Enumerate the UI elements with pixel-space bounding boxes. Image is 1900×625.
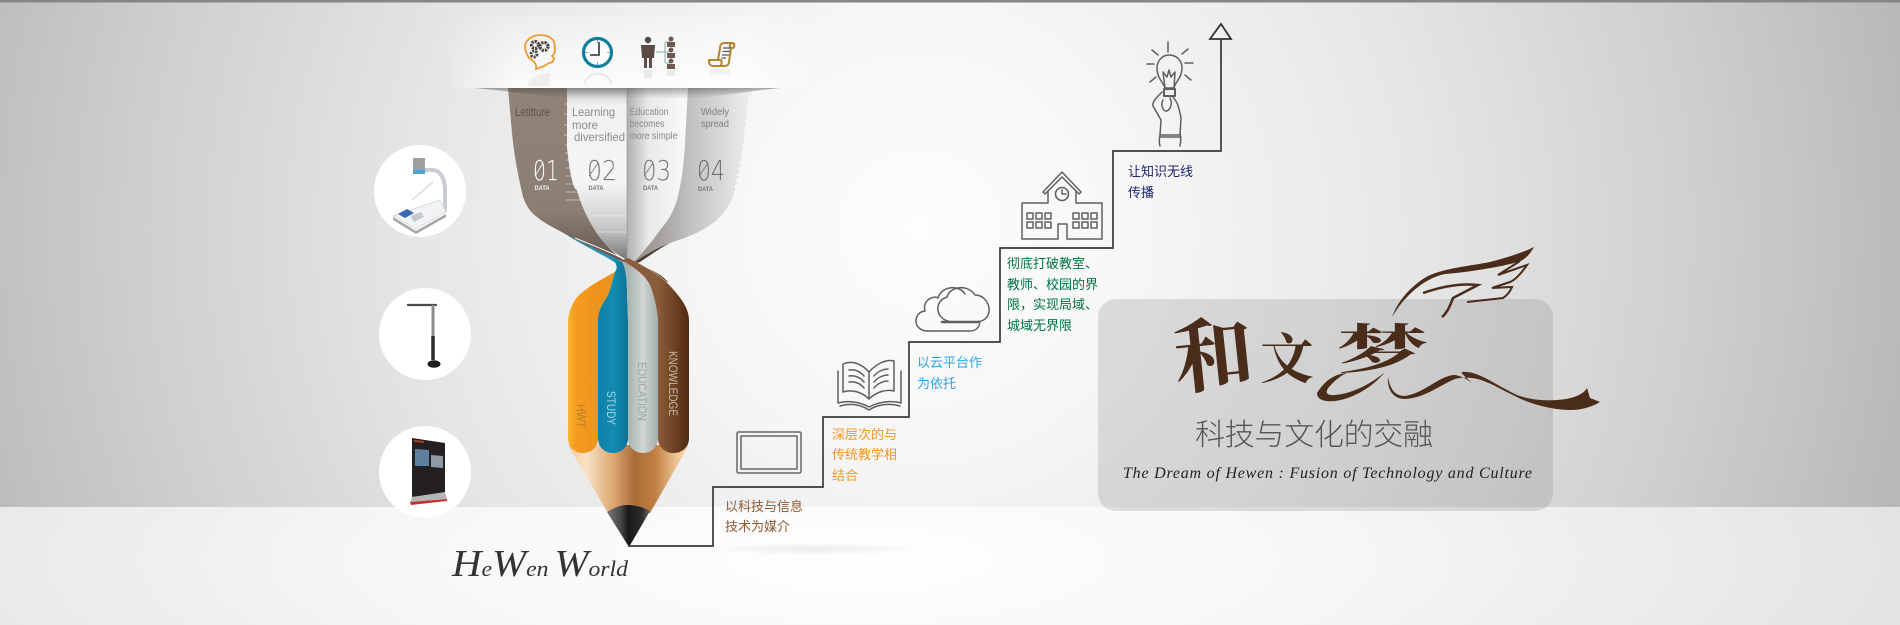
step caption 3: 以云平台作 xyxy=(917,355,982,370)
icon: cloud xyxy=(916,288,989,331)
logo swoosh xyxy=(1317,372,1385,401)
logo tail xyxy=(1388,372,1600,410)
ribbon text: 02: more xyxy=(572,118,598,132)
product circle: scanner lamp xyxy=(379,288,471,380)
step caption 1: 以科技与信息 xyxy=(725,499,803,514)
logo text: 和 xyxy=(1167,288,1259,411)
ribbon text: 03: Education xyxy=(630,106,669,118)
logo text: 梦 xyxy=(1336,307,1429,383)
step shadow xyxy=(705,543,925,555)
stripe: blue xyxy=(598,258,628,453)
ribbon text: 02 xyxy=(572,105,625,192)
ribbon text: 02: DATA xyxy=(588,185,604,192)
stripe: grey: EDUCATION xyxy=(635,362,649,421)
signature: HeWen World xyxy=(451,543,629,585)
step caption 4: 限，实现局域、 xyxy=(1007,297,1098,312)
ribbon text: 04: 04 xyxy=(697,154,725,187)
stripe: blue: STUDY xyxy=(604,391,618,425)
step caption 4: 城域无界限 xyxy=(1007,318,1072,333)
ribbon text: 02: diversified xyxy=(574,130,625,144)
logo text: 文 xyxy=(1260,317,1314,394)
ribbon text: 01: 01 xyxy=(533,154,559,187)
product circle: display kiosk xyxy=(379,426,471,518)
icon: light bulb in hand xyxy=(1147,42,1193,146)
ribbon text: 03 xyxy=(630,106,678,192)
twist bands xyxy=(567,235,682,300)
ribbon text: 02: 02 xyxy=(587,154,617,187)
ribbon text: 03: DATA xyxy=(643,185,658,192)
icon: organisation chart xyxy=(641,36,675,78)
logo wing xyxy=(1392,247,1534,317)
ribbon text: 01 xyxy=(515,105,559,192)
ribbon text: 03: 03 xyxy=(642,154,671,187)
icon: scroll xyxy=(709,43,734,75)
step caption 4: 教师、校园的界 xyxy=(1007,277,1098,292)
step caption 4: 彻底打破教室、 xyxy=(1007,256,1098,271)
brand logo xyxy=(1167,247,1600,411)
icon panel with shadow xyxy=(476,38,780,98)
icon: clock xyxy=(584,38,612,84)
ribbon text: 04: DATA xyxy=(698,186,713,193)
icon: tablet xyxy=(737,432,801,473)
ribbon text: 01: Letitture xyxy=(515,105,550,119)
step caption 2: 深层次的与 xyxy=(832,427,897,442)
step caption 5: 传播 xyxy=(1128,185,1154,200)
pencil wood xyxy=(568,445,689,513)
brand english slogan: The Dream of Hewen : Fusion of Technology and Culture xyxy=(1123,465,1532,482)
ribbon text: 04: Widely xyxy=(701,106,730,118)
ribbon text: 01: DATA xyxy=(534,185,550,192)
ribbon text: 03: more simple xyxy=(630,130,678,142)
brand chinese slogan: 科技与文化的交融 xyxy=(1195,410,1433,454)
pencil ribbons xyxy=(508,88,753,265)
stripe: brown xyxy=(622,258,689,453)
staircase arrow xyxy=(628,24,1231,546)
ribbon text: 04 xyxy=(697,106,730,193)
pencil lead tip xyxy=(607,505,650,547)
stripe: orange xyxy=(568,272,615,453)
panel: brand xyxy=(1098,299,1553,511)
icon: head with gears xyxy=(525,35,555,86)
step caption 1: 技术为媒介 xyxy=(725,519,790,534)
step caption 2: 结合 xyxy=(832,468,858,483)
step caption 3: 为依托 xyxy=(917,376,956,391)
icon: school xyxy=(1022,172,1102,239)
pencil xyxy=(567,235,689,547)
product circle: document camera xyxy=(374,145,466,237)
stripe: grey xyxy=(617,260,658,453)
ribbon text: 03: becomes xyxy=(630,118,664,130)
ribbon text: 02: Learning xyxy=(572,105,615,119)
step caption 2: 传统教学相 xyxy=(832,447,897,462)
stripe: brown: KNOWLEDGE xyxy=(666,351,680,416)
icon: open book xyxy=(838,361,901,410)
ribbon text: 04: spread xyxy=(701,118,729,130)
step caption 5: 让知识无线 xyxy=(1128,164,1193,179)
stripe: orange: HWT xyxy=(574,404,588,429)
